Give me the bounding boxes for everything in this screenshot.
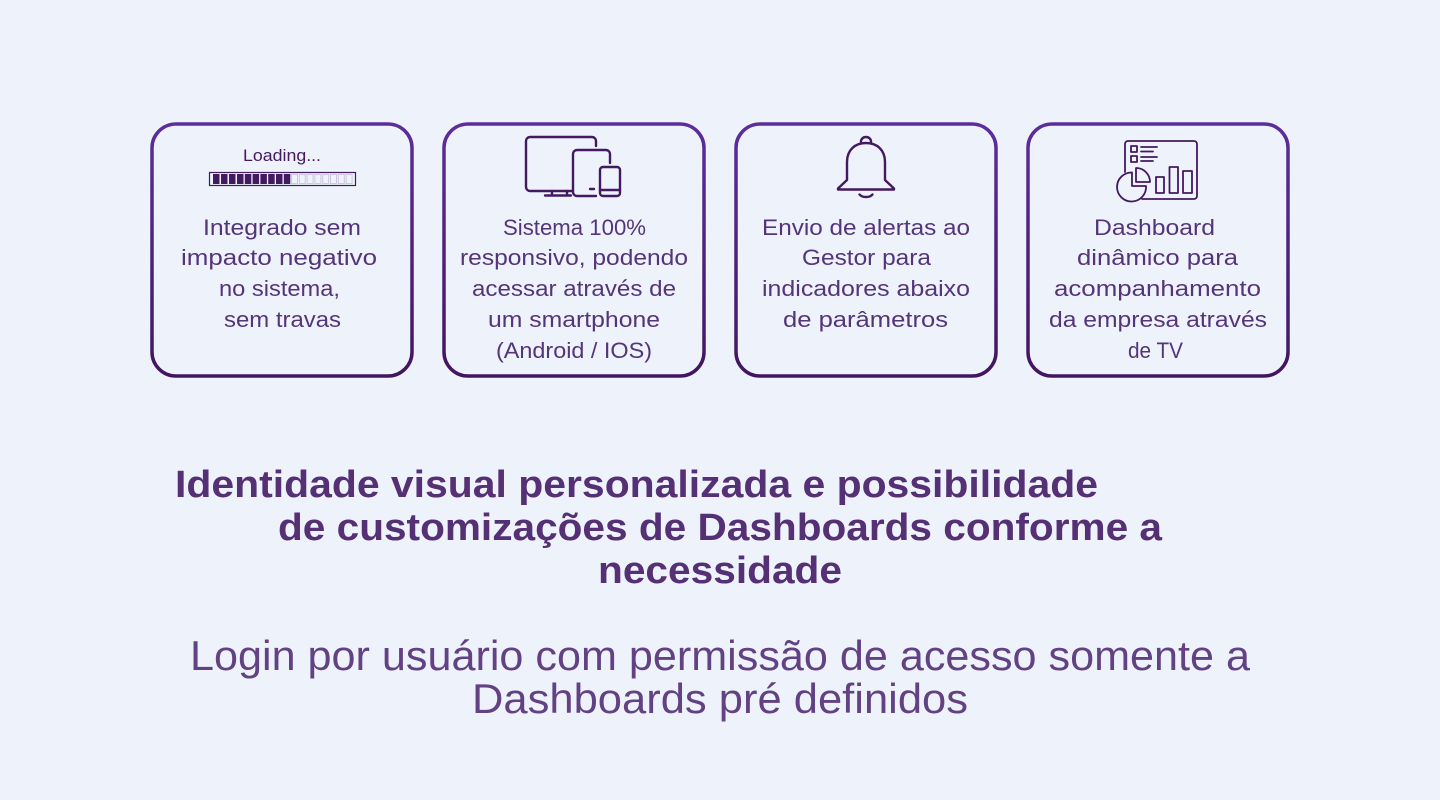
card text: Envio de alertas ao [762,215,970,240]
panel: alertas [736,124,996,376]
card text: responsivo, podendo [460,245,688,270]
heading: necessidade [598,550,842,592]
card text: da empresa através [1049,307,1267,332]
heading: de customizações de Dashboards conforme a [278,507,1163,549]
card text: impacto negativo [181,245,377,270]
card text: Gestor para [802,245,932,270]
icon: dashboard [1117,141,1197,201]
card text: acompanhamento [1054,276,1261,301]
icon: bell [838,137,894,197]
card text: de TV [1128,338,1183,363]
panel: sistema responsivo [444,124,704,376]
heading [175,464,1163,592]
card text [460,215,688,363]
panel: dashboard para TV [1028,124,1288,376]
icon: loading bar [210,146,356,186]
icon: devices [526,137,620,196]
subheading: login: Login por usuário com permissão de acesso somente a [190,632,1251,679]
card text [762,215,970,332]
subheading: login [190,632,1251,722]
card text: um smartphone [488,307,660,332]
panel: integrado sem impacto [152,124,412,376]
card text: dinâmico para [1077,245,1239,270]
card text: sem travas [224,307,341,332]
card text: de parâmetros [783,307,948,332]
card text: acessar através de [472,276,676,301]
heading: Identidade visual personalizada e possibilidade [175,464,1098,506]
card text [181,215,377,332]
card text: indicadores abaixo [762,276,970,301]
card text: Sistema 100% [503,215,646,240]
card text [1049,215,1267,363]
subheading: login: Dashboards pré definidos [472,675,968,722]
card text: Integrado sem [203,215,361,240]
icon: loading bar: Loading... [243,146,321,165]
card text: no sistema, [219,276,340,301]
card text: Dashboard [1094,215,1215,240]
card text: (Android / IOS) [496,338,652,363]
